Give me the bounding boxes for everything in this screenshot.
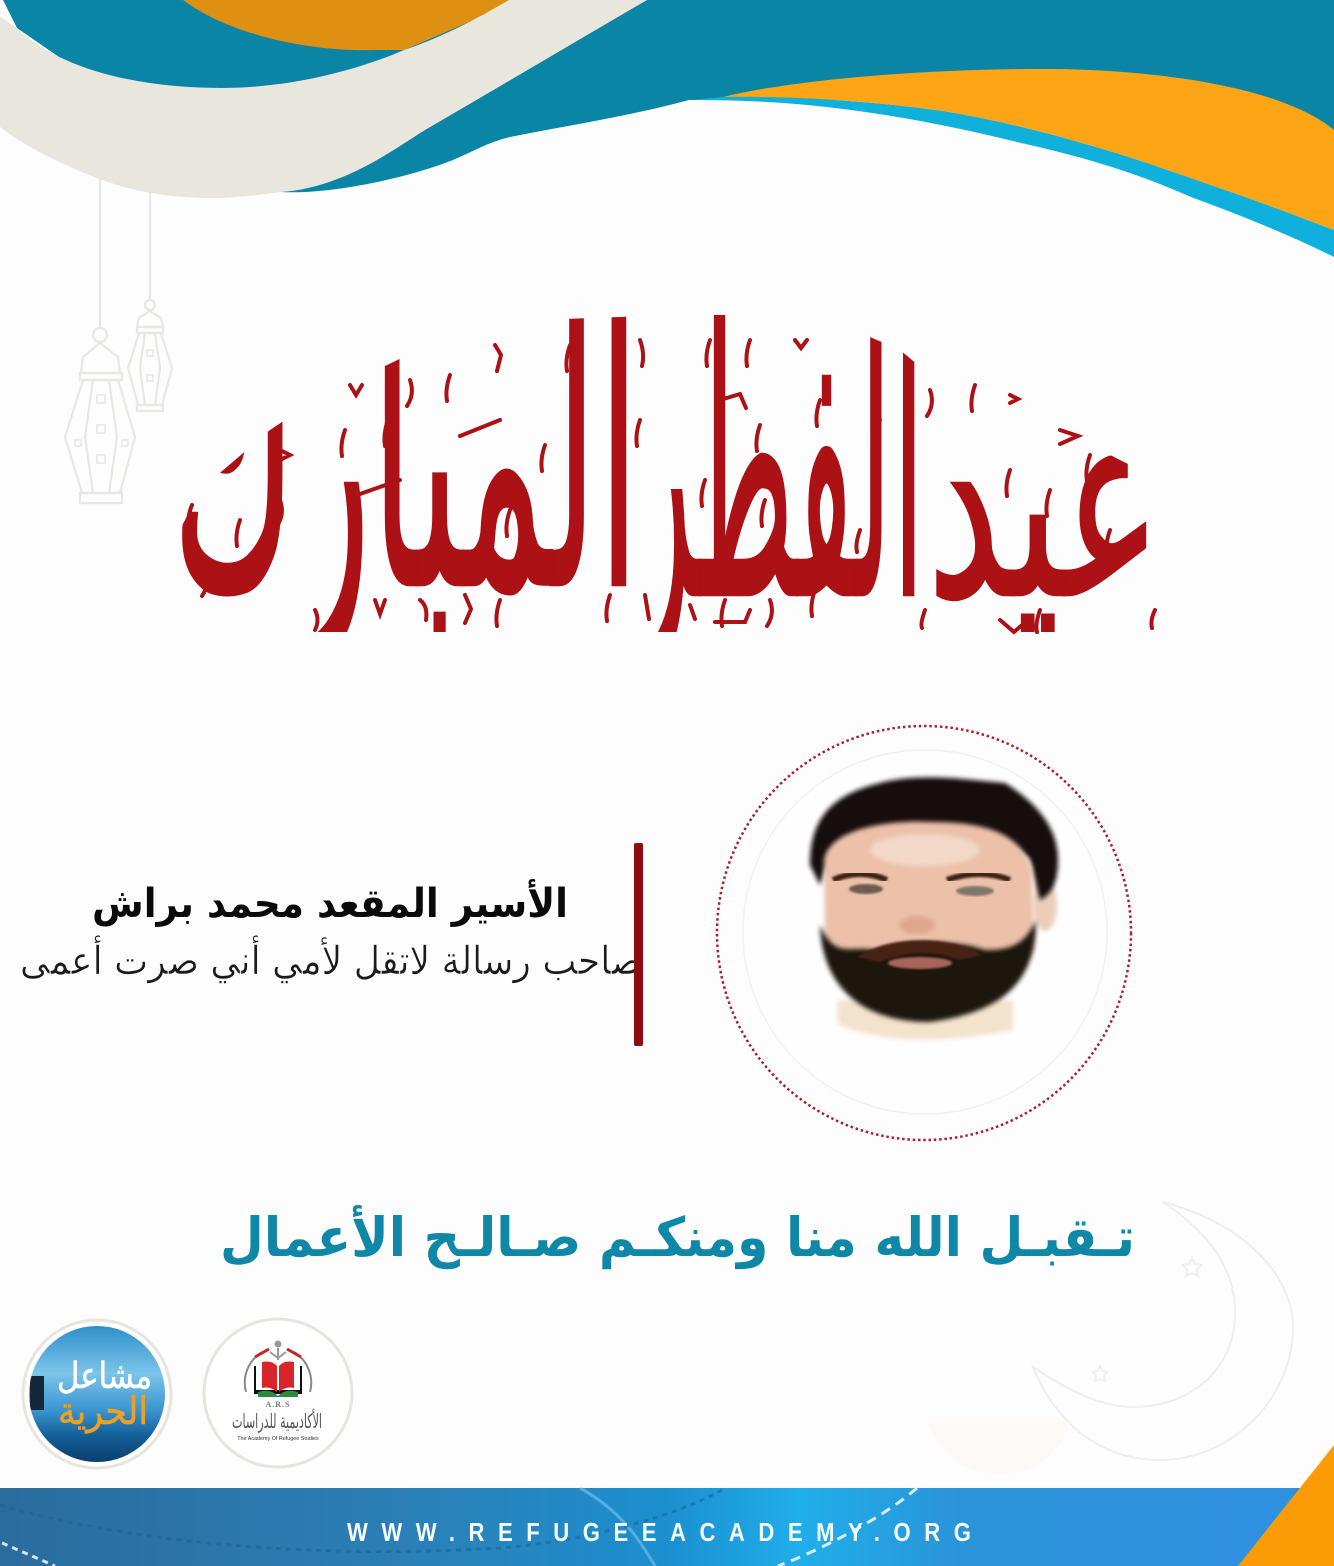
brows (833, 874, 1010, 880)
teal wave (3, 0, 1334, 200)
logo: Mashaal Al-Hurriya (23, 1320, 171, 1468)
flag accents (255, 1349, 301, 1357)
closing greeting: تـقبـل الله منا ومنكـم صـالـح الأعمال (220, 1205, 1135, 1269)
orange wave (723, 69, 1334, 230)
logo dark edge (30, 1376, 44, 1410)
inner faint ring (743, 750, 1107, 1114)
website address: WWW.REFUGEEACADEMY.ORG (347, 1518, 971, 1547)
small lantern (128, 170, 172, 411)
academy english name: The Academy Of Refugee Studies (237, 1436, 319, 1442)
dotted ring (717, 726, 1131, 1140)
A.R.S label: A.R.S (265, 1400, 291, 1409)
logo subtitle: الحرية (58, 1389, 148, 1434)
footer band (0, 1488, 1334, 1566)
neck and shirt (837, 1000, 1013, 1040)
figure (274, 1340, 282, 1348)
beige wave (0, 0, 647, 198)
footer curves (580, 1488, 655, 1566)
book icon (254, 1366, 302, 1394)
vertical red bar (634, 843, 643, 1046)
mustache and lips (857, 940, 982, 962)
faint pink shape (927, 1422, 1070, 1475)
face (824, 822, 1034, 1000)
ear (1033, 879, 1057, 931)
crescent (1033, 1202, 1293, 1460)
laurel arcs (245, 1352, 311, 1392)
name and description (20, 878, 642, 984)
forehead highlight (870, 834, 980, 866)
prisoner name: الأسير المقعد محمد براش (92, 878, 568, 927)
nose (899, 916, 935, 934)
title words clipped to arch (182, 315, 1146, 632)
title words clipped to arch: المبارك (172, 232, 640, 680)
eyes (849, 884, 883, 894)
header wave shapes (0, 0, 1334, 257)
crescent and stars decoration (1033, 1202, 1293, 1460)
portrait (717, 726, 1131, 1140)
orange top wave (183, 0, 520, 50)
academy arabic name: الأكاديمية للدراسات (232, 1409, 322, 1433)
hair (810, 777, 1058, 900)
beard (820, 920, 1036, 1022)
light blue wave (689, 97, 1334, 257)
description line: صاحب رسالة لاتقل لأمي أني صرت أعمى (20, 935, 642, 984)
lanterns decoration (65, 170, 172, 503)
calligraphy title: Eid al-Fitr al-Mubarak (182, 315, 1158, 635)
orange corner (1238, 1445, 1334, 1566)
large lantern (65, 170, 135, 503)
star (1093, 1366, 1107, 1381)
word: Eid: عيد (927, 344, 1162, 659)
decorative tashkeel marks (188, 340, 1155, 632)
star (1183, 1258, 1201, 1276)
logo: Academy of Refugee Studies (204, 1319, 352, 1467)
logo title: مشاعل (57, 1356, 152, 1397)
